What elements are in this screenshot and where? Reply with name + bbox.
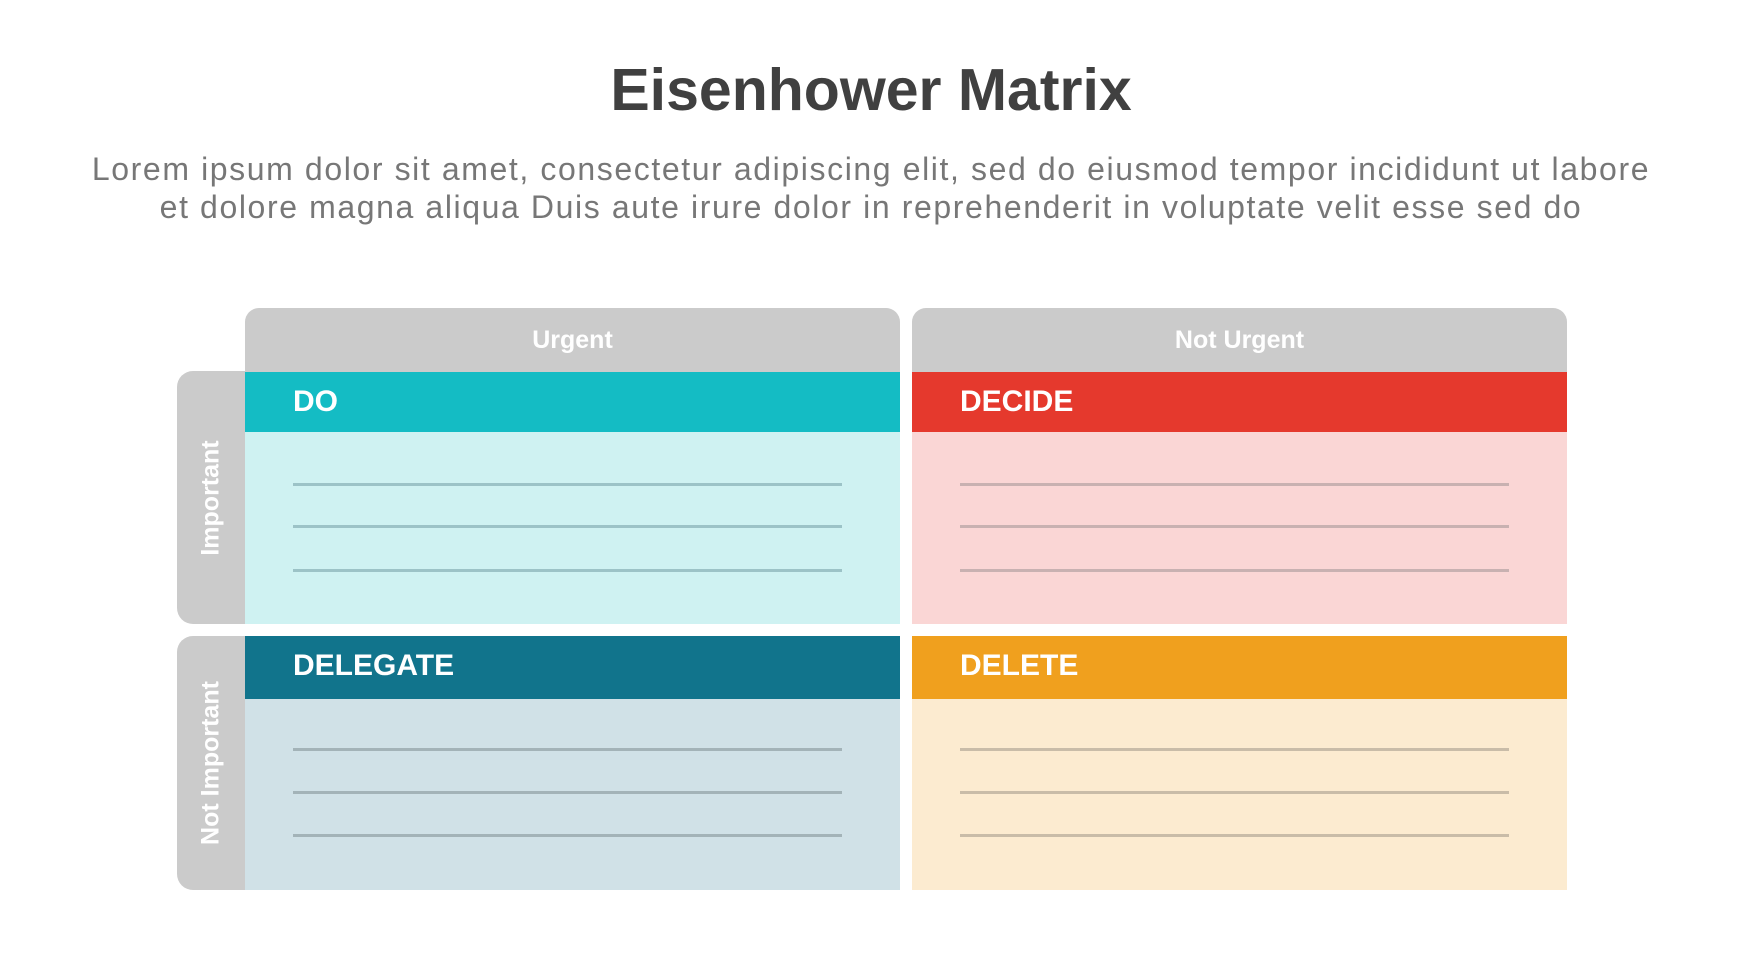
panel: DELEGATE [245, 636, 900, 890]
side tab: Important: Important [196, 440, 224, 555]
side tab: Not Important [177, 636, 245, 890]
header: Urgent [245, 308, 900, 372]
header: Not Urgent: Not Urgent [1175, 326, 1304, 354]
panel: DECIDE: DECIDE [960, 385, 1073, 418]
subtitle text [92, 151, 1650, 225]
panel: DO [245, 372, 900, 624]
subtitle text: Lorem ipsum dolor sit amet, consectetur adipiscing elit, sed do eiusmod tempor incididunt ut labore [92, 151, 1650, 187]
header: Not Urgent [912, 308, 1567, 372]
panel: DELETE [912, 636, 1567, 890]
subtitle text: et dolore magna aliqua Duis aute irure dolor in reprehenderit in voluptate velit esse sed do [160, 189, 1582, 225]
header: Urgent: Urgent [532, 326, 613, 354]
side tab: Not Important: Not Important [196, 681, 224, 845]
side tab: Important [177, 371, 245, 624]
panel: DELETE: DELETE [960, 649, 1078, 682]
title: Eisenhower Matrix [610, 57, 1132, 123]
panel: DELEGATE: DELEGATE [293, 649, 454, 682]
panel: DECIDE [912, 372, 1567, 624]
panel: DO: DO [293, 385, 338, 418]
